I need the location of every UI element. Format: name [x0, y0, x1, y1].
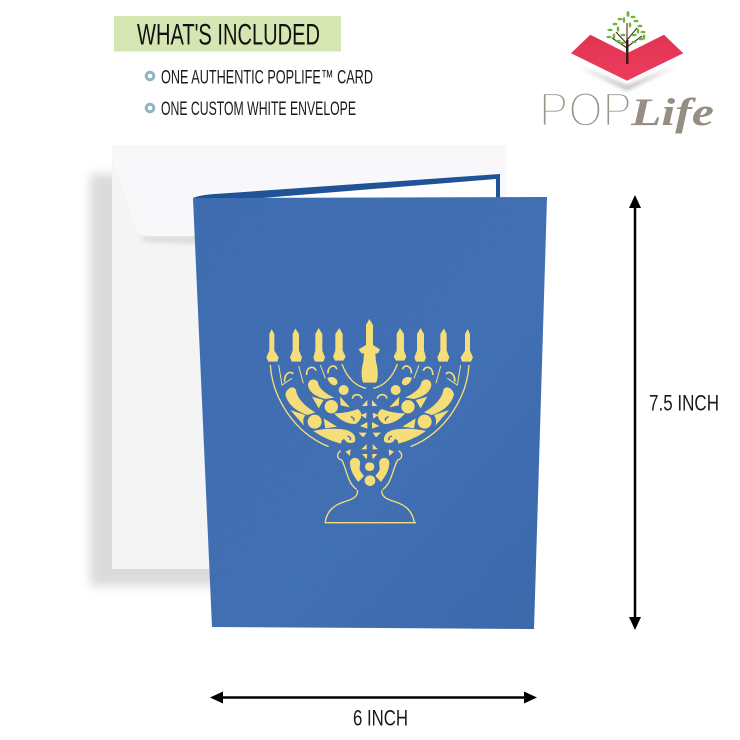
- icon: red open book: [571, 35, 683, 81]
- center candle: [359, 319, 380, 383]
- card front panel: [193, 197, 547, 629]
- foot base line: [325, 521, 416, 525]
- text: item two: ONE CUSTOM WHITE ENVELOPE: [161, 98, 356, 120]
- icon: bullet one: [146, 72, 154, 80]
- card back edge: [193, 174, 500, 199]
- list: included items: [146, 66, 373, 120]
- panel: what's included heading: WHAT'S INCLUDED: [137, 18, 320, 52]
- icon: bullet two: [146, 104, 154, 112]
- envelope: [90, 145, 506, 586]
- icon: logo book shadow: [578, 66, 676, 90]
- illustration: menorah: [266, 319, 473, 523]
- label: width: 6 INCH: [353, 706, 408, 730]
- logo: PopLife: [539, 11, 714, 137]
- text: item one: ONE AUTHENTIC POPLIFE™ CARD: [161, 66, 373, 88]
- icon: tree: [606, 11, 646, 64]
- envelope body: [112, 145, 506, 569]
- card: [193, 197, 547, 629]
- white inside of card: [250, 178, 497, 198]
- label: height: 7.5 INCH: [649, 390, 719, 416]
- arrow: height: [629, 195, 641, 630]
- center base circle: [365, 475, 375, 486]
- navy back panel edge: [193, 174, 500, 199]
- text: POP: POP: [539, 84, 632, 137]
- envelope shadow: [90, 174, 270, 586]
- panel: what's included heading: [114, 16, 341, 52]
- text: Life: Life: [630, 91, 714, 134]
- envelope flap: [112, 145, 506, 236]
- envelope flap shadow: [140, 236, 200, 244]
- arrow: width: [210, 692, 537, 704]
